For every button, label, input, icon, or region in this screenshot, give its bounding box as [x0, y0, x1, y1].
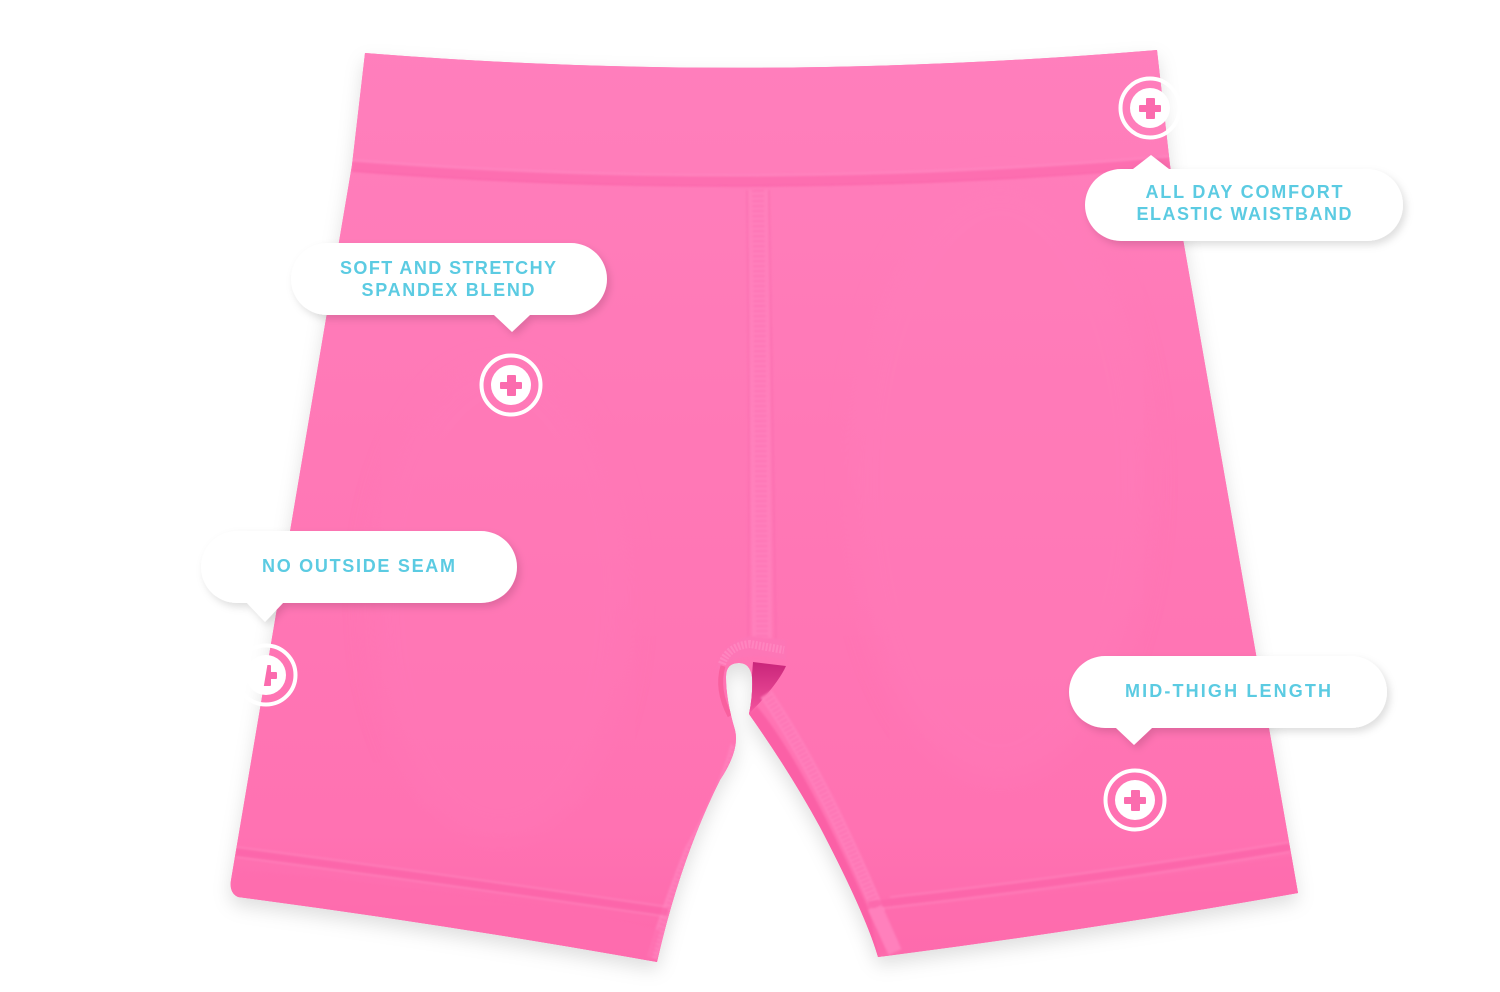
callout: length [1069, 656, 1387, 745]
callout: waistband [1085, 155, 1403, 241]
marker: outside seam [256, 644, 298, 706]
marker: spandex [482, 356, 540, 414]
waistband seam [352, 156, 1170, 186]
callout: length: MID-THIGH LENGTH [1125, 681, 1331, 701]
callout: waistband: ELASTIC WAISTBAND [1136, 204, 1352, 224]
left hem [232, 847, 668, 965]
marker: length [1106, 770, 1164, 830]
center seam [752, 463, 771, 637]
callout: spandex: SPANDEX BLEND [362, 280, 534, 300]
shorts garment [200, 40, 1320, 970]
callout: spandex: SOFT AND STRETCHY [340, 258, 556, 278]
callout: waistband: ALL DAY COMFORT [1146, 182, 1342, 202]
right hem [868, 842, 1300, 958]
marker: waistband [1120, 78, 1180, 138]
callout: spandex [291, 243, 607, 332]
crotch bar [716, 636, 786, 716]
inseam seams [652, 694, 892, 958]
callout: outside seam [201, 531, 517, 622]
callout: outside seam: NO OUTSIDE SEAM [262, 556, 455, 576]
